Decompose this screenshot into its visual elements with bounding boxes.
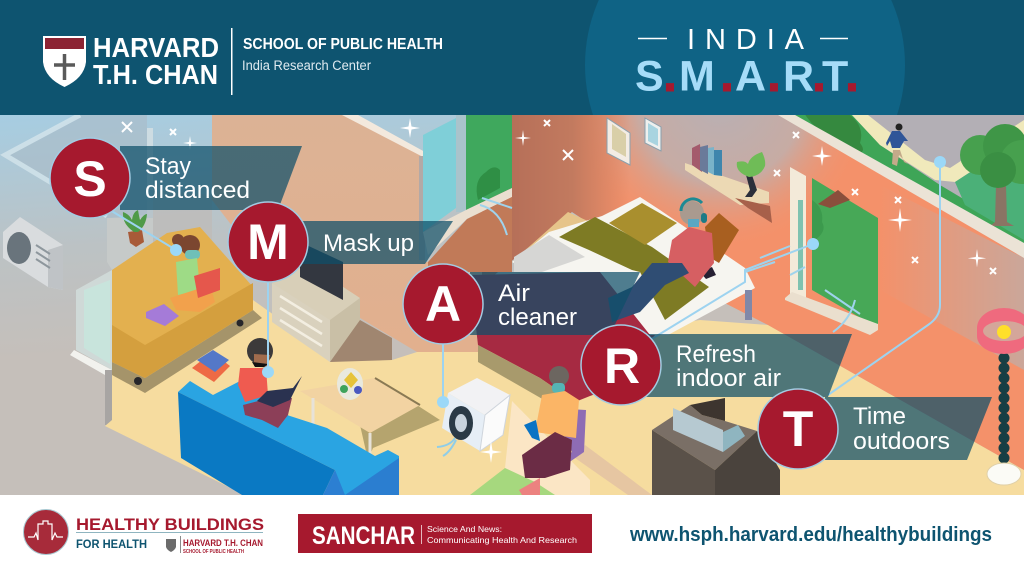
AC unit	[3, 217, 63, 290]
step M banner	[228, 202, 453, 282]
Harvard wordmark	[93, 32, 219, 90]
title India: INDIA	[687, 24, 805, 56]
woman on yellow sofa	[170, 234, 220, 312]
Healthy Buildings logo: HARVARD T.H. CHAN	[183, 538, 263, 548]
gray column	[107, 218, 153, 270]
step M text: Mask up	[323, 230, 414, 257]
title S.M.A.R.T.: S.M.A.R.T.	[635, 52, 858, 100]
school name: SCHOOL OF PUBLIC HEALTH	[243, 36, 443, 53]
potted plant	[123, 210, 147, 247]
step A banner: A	[425, 276, 461, 332]
picture frames	[607, 118, 661, 165]
step S badge	[50, 138, 130, 218]
step S banner: distanced	[145, 177, 250, 204]
man on bed	[608, 199, 714, 322]
step R banner: indoor air	[676, 365, 781, 392]
scene background	[0, 115, 1024, 495]
air cleaner	[437, 378, 510, 456]
TV	[300, 242, 343, 300]
title rules	[638, 38, 848, 40]
outdoor street, lawn and path	[780, 105, 1024, 262]
wall corner edge	[419, 156, 425, 260]
Sanchar logo: Science And News:	[427, 524, 502, 534]
logo divider	[231, 28, 232, 95]
bedroom side wall	[482, 115, 572, 285]
Healthy Buildings logo: FOR HEALTH	[76, 537, 147, 551]
air flow arrows	[480, 198, 860, 332]
footer band	[0, 495, 1024, 576]
small x marks	[122, 120, 996, 274]
step R badge	[581, 325, 661, 405]
step S banner	[50, 138, 302, 218]
Healthy Buildings logo: HEALTHY BUILDINGS	[76, 515, 264, 534]
Sanchar logo: SANCHAR	[312, 522, 415, 550]
wall shelf with books and plant	[685, 144, 772, 223]
window facing outdoors left	[423, 115, 512, 272]
step S banner: S	[73, 151, 107, 207]
bedroom tan floor corner	[512, 212, 590, 270]
step T banner: outdoors	[853, 428, 950, 455]
walking person	[886, 124, 908, 166]
coffee table	[300, 378, 440, 461]
decorated vase	[337, 368, 363, 400]
header circle	[585, 0, 905, 115]
step A banner: cleaner	[498, 304, 577, 331]
yellow sofa	[112, 227, 262, 393]
step M badge	[228, 202, 308, 282]
step A text: Air	[498, 280, 530, 307]
step R text: Refresh	[676, 341, 756, 368]
Sanchar logo: Communicating Health And Research	[427, 535, 577, 545]
left wall shading	[0, 115, 147, 218]
Harvard wordmark: T.H. CHAN	[93, 59, 218, 90]
thin wall upright	[147, 128, 153, 190]
outdoor wall top edge	[778, 115, 1024, 258]
floor lamp	[977, 308, 1024, 485]
bedroom window	[785, 167, 878, 335]
Healthy Buildings logo	[24, 510, 264, 555]
wall fade at right	[880, 185, 1024, 370]
sparkles	[183, 118, 986, 463]
step T badge	[758, 389, 838, 469]
wall left shade	[572, 115, 630, 250]
rug and woman seated on chair	[470, 366, 652, 495]
step A badge	[403, 264, 483, 344]
bed	[470, 197, 755, 412]
step T text: Time	[853, 403, 906, 430]
step R banner	[581, 325, 852, 405]
step M banner: M	[247, 214, 289, 270]
left room outline	[5, 115, 107, 216]
step S text: Stay	[145, 153, 191, 180]
header band	[0, 0, 1024, 115]
tv stand	[272, 262, 392, 362]
step T banner	[758, 389, 992, 469]
step T banner: T	[783, 401, 813, 457]
wall top edge	[342, 115, 425, 158]
man with laptop	[238, 338, 302, 428]
purple book	[146, 304, 179, 326]
Harvard wordmark: HARVARD	[93, 32, 219, 63]
balcony glass door	[70, 270, 112, 425]
illustrated apartment scene	[0, 105, 1024, 495]
Sanchar logo	[298, 514, 592, 553]
bedroom main wall	[572, 115, 1024, 470]
connector lines	[110, 162, 940, 402]
partition wall	[153, 190, 212, 250]
step A banner	[403, 264, 640, 344]
peach living room wall	[212, 115, 482, 352]
armchair	[652, 398, 780, 495]
connector dots	[170, 156, 946, 408]
Healthy Buildings logo: SCHOOL OF PUBLIC HEALTH	[183, 549, 244, 555]
Harvard shield	[43, 36, 86, 87]
tree outdoors	[960, 124, 1024, 226]
step R banner: R	[604, 338, 640, 394]
blue sofa	[178, 381, 399, 495]
website URL: www.hsph.harvard.edu/healthybuildings	[629, 524, 992, 546]
floor	[105, 300, 1024, 495]
stacked books	[192, 350, 230, 382]
research center: India Research Center	[242, 58, 371, 73]
wall top haze	[572, 115, 878, 270]
